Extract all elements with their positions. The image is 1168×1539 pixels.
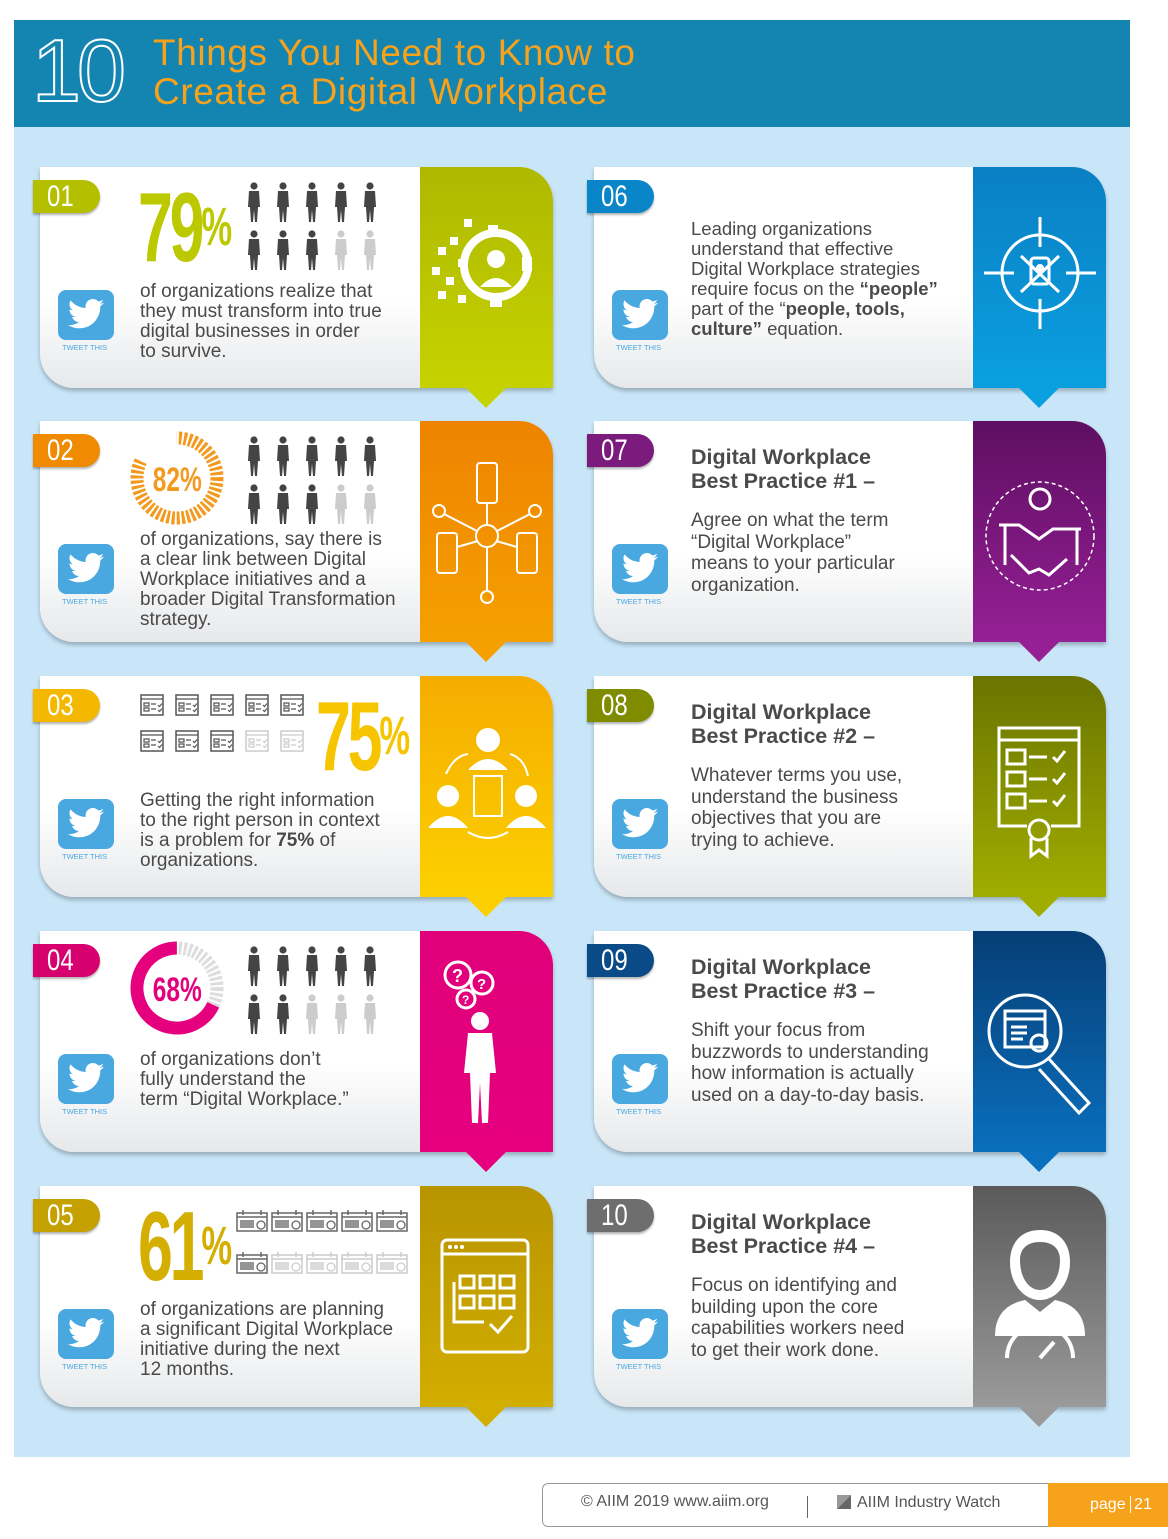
number tab 06	[587, 180, 654, 213]
people pictogram	[248, 182, 376, 270]
number tab 10	[587, 1199, 654, 1232]
card 09	[594, 931, 1106, 1152]
text 04: of organizations don’t	[140, 1049, 321, 1070]
number tab 10: 10	[601, 1199, 628, 1232]
tweet icon: TWEET THIS	[616, 343, 661, 352]
text 06: understand that effective	[691, 238, 893, 259]
panel: icon 06	[973, 167, 1106, 388]
card 04	[40, 931, 553, 1152]
text 05: a significant Digital Workplace	[140, 1319, 393, 1340]
text 10: capabilities workers need	[691, 1318, 904, 1339]
text 03	[140, 790, 380, 871]
text 02: strategy.	[140, 609, 211, 630]
stat 61%: 61%	[138, 1191, 229, 1301]
number tab 07	[587, 434, 654, 467]
page number: page 21	[1090, 1496, 1152, 1513]
text 05: 12 months.	[140, 1359, 234, 1380]
number tab 03	[33, 689, 100, 722]
tweet icon	[612, 799, 668, 861]
text 02: broader Digital Transformation	[140, 589, 396, 610]
text 06	[691, 218, 938, 339]
text 09: buzzwords to understanding	[691, 1042, 929, 1062]
panel: icon 04	[420, 931, 553, 1152]
text 08: Digital Workplace	[691, 700, 871, 724]
text 06: Leading organizations	[691, 218, 872, 239]
footer copyright: © AIIM 2019 www.aiim.org	[581, 1493, 769, 1510]
text 10	[691, 1210, 904, 1360]
stat 68% ring: 68%	[153, 971, 202, 1009]
card 08	[594, 676, 1106, 897]
panel: icon 03	[420, 676, 553, 897]
text 05: of organizations are planning	[140, 1299, 384, 1320]
text 01: to survive.	[140, 341, 227, 362]
text 09: how information is actually	[691, 1063, 914, 1084]
text 07: organization.	[691, 574, 800, 596]
number tab 08	[587, 689, 654, 722]
card 05	[40, 1186, 553, 1407]
card 01	[40, 167, 553, 388]
text 08	[691, 700, 902, 850]
number tab 02: 02	[47, 434, 74, 467]
tweet icon: TWEET THIS	[62, 852, 107, 861]
people pictogram	[248, 436, 376, 524]
text 03: is a problem for 75% of	[140, 830, 335, 851]
panel: icon 10	[973, 1186, 1106, 1407]
stat 68% ring	[130, 942, 224, 1034]
panel: icon 05	[420, 1186, 553, 1407]
tweet icon	[612, 1054, 668, 1116]
text 10: to get their work done.	[691, 1340, 879, 1360]
text 07: Agree on what the term	[691, 510, 888, 531]
text 09: Best Practice #3 –	[691, 979, 875, 1003]
text 08: trying to achieve.	[691, 830, 835, 850]
text 01: of organizations realize that	[140, 281, 372, 302]
text 10: Digital Workplace	[691, 1210, 871, 1234]
panel: icon 04: ?	[452, 966, 463, 986]
card 07	[594, 421, 1106, 642]
text 06: require focus on the “people”	[691, 278, 938, 299]
title text: Things You Need to Know to	[153, 32, 636, 73]
text 09	[691, 955, 929, 1106]
tweet icon	[58, 1309, 114, 1371]
number tab 06: 06	[601, 180, 628, 213]
text 10: building upon the core	[691, 1296, 878, 1318]
text 03: to the right person in context	[140, 810, 380, 831]
text 07	[691, 445, 895, 596]
people pictogram	[248, 946, 376, 1034]
text 03: Getting the right information	[140, 790, 374, 811]
text 08: Best Practice #2 –	[691, 724, 875, 748]
number tab 01	[33, 180, 100, 213]
tweet icon: TWEET THIS	[616, 852, 661, 861]
card 02	[40, 421, 553, 642]
panel: icon 04: ?	[477, 976, 486, 993]
text 05: initiative during the next	[140, 1339, 340, 1360]
tweet icon	[612, 544, 668, 606]
page number	[1048, 1483, 1168, 1527]
number tab 09	[587, 944, 654, 977]
card 03	[40, 676, 553, 897]
text 02: a clear link between Digital	[140, 549, 366, 570]
panel: icon 09	[973, 931, 1106, 1152]
tweet icon	[58, 1054, 114, 1116]
panel: icon 04: ?	[462, 993, 469, 1007]
text 03: organizations.	[140, 850, 258, 871]
text 04: fully understand the	[140, 1069, 306, 1090]
stat 82% ring	[130, 432, 224, 524]
tweet icon	[58, 290, 114, 352]
text 04	[140, 1049, 349, 1110]
calendar pictogram	[236, 1210, 408, 1274]
tweet icon: TWEET THIS	[62, 1107, 107, 1116]
text 02	[140, 529, 396, 630]
title text	[153, 32, 636, 112]
panel: icon 02	[420, 421, 553, 642]
number tab 04	[33, 944, 100, 977]
text 08: objectives that you are	[691, 808, 881, 829]
tweet icon: TWEET THIS	[62, 343, 107, 352]
tweet icon	[58, 544, 114, 606]
text 07: Digital Workplace	[691, 445, 871, 469]
number tab 02	[33, 434, 100, 467]
text 06: part of the “people, tools,	[691, 298, 905, 319]
tweet icon: TWEET THIS	[616, 597, 661, 606]
tweet icon: TWEET THIS	[616, 1362, 661, 1371]
text 01: digital businesses in order	[140, 321, 360, 342]
tweet icon: TWEET THIS	[616, 1107, 661, 1116]
tweet icon	[58, 799, 114, 861]
tweet icon: TWEET THIS	[62, 597, 107, 606]
tweet icon: TWEET THIS	[62, 1362, 107, 1371]
text 10: Best Practice #4 –	[691, 1234, 875, 1258]
text 05	[140, 1299, 393, 1380]
number tab 07: 07	[601, 434, 628, 467]
text 09: Shift your focus from	[691, 1020, 865, 1041]
panel: icon 01	[420, 167, 553, 388]
text 04: term “Digital Workplace.”	[140, 1089, 349, 1110]
text 10: Focus on identifying and	[691, 1275, 897, 1296]
text 09: used on a day-to-day basis.	[691, 1084, 924, 1106]
text 02: of organizations, say there is	[140, 529, 382, 550]
number tab 08: 08	[601, 689, 628, 722]
text 02: Workplace initiatives and a	[140, 569, 366, 590]
text 07: Best Practice #1 –	[691, 469, 875, 493]
number tab 03: 03	[47, 689, 74, 722]
text 07: means to your particular	[691, 553, 895, 574]
number tab 04: 04	[47, 944, 74, 977]
tweet icon	[612, 1309, 668, 1371]
stat 79%: 79%	[138, 172, 229, 282]
footer separator	[807, 1496, 808, 1518]
document pictogram	[140, 694, 304, 752]
header banner	[14, 20, 1130, 127]
number tab 01: 01	[47, 180, 74, 213]
card 10	[594, 1186, 1106, 1407]
footer bar	[542, 1483, 1168, 1527]
title text: Create a Digital Workplace	[153, 71, 608, 112]
title number 10: 10	[32, 21, 122, 120]
text 06: Digital Workplace strategies	[691, 258, 920, 279]
text 06: culture” equation.	[691, 318, 843, 339]
number tab 05	[33, 1199, 100, 1232]
text 01: they must transform into true	[140, 301, 382, 322]
card 06	[594, 167, 1106, 388]
number tab 05: 05	[47, 1199, 74, 1232]
panel: icon 08	[973, 676, 1106, 897]
text 09: Digital Workplace	[691, 955, 871, 979]
text 08: Whatever terms you use,	[691, 765, 902, 786]
text 08: understand the business	[691, 786, 898, 808]
text 01	[140, 281, 382, 362]
stat 82% ring: 82%	[153, 461, 202, 499]
tweet icon	[612, 290, 668, 352]
footer industry watch: AIIM Industry Watch	[857, 1494, 1000, 1511]
panel: icon 07	[973, 421, 1106, 642]
text 07: “Digital Workplace”	[691, 532, 851, 552]
number tab 09: 09	[601, 944, 628, 977]
stat 75%: 75%	[316, 681, 407, 791]
